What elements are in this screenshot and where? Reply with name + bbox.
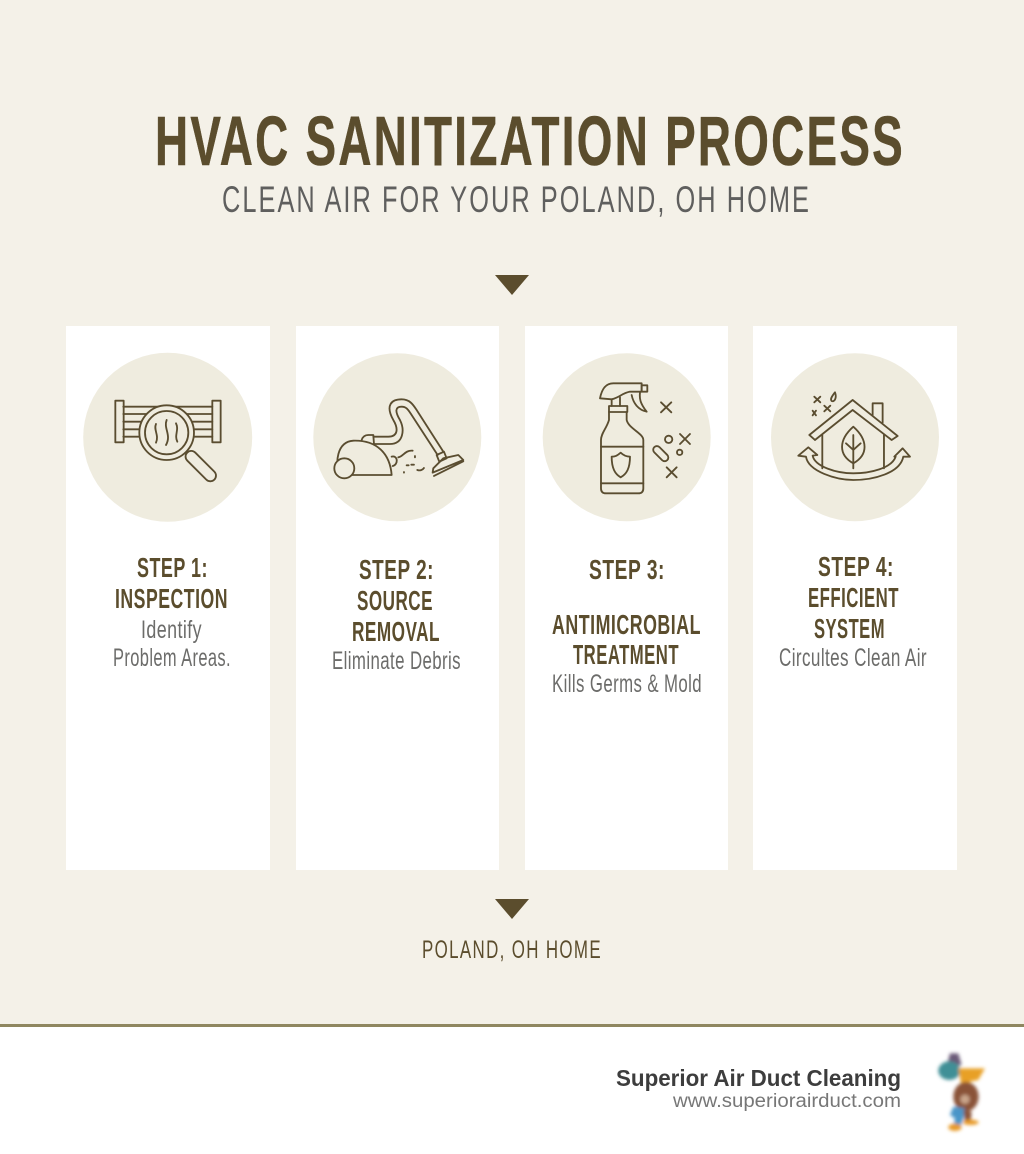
arrow: bottom	[495, 899, 529, 919]
website: www.superiorairduct.com	[672, 1091, 901, 1112]
step 2 name	[352, 585, 440, 647]
arrow: top	[495, 275, 529, 295]
icon: spray bottle	[543, 353, 711, 521]
step 1 description: Identify	[141, 616, 202, 644]
panel: step 1	[66, 326, 270, 870]
footer	[0, 1024, 1024, 1154]
brand name: Superior Air Duct Cleaning	[616, 1065, 901, 1091]
icon: vacuum cleaner	[313, 353, 481, 521]
step 1 name: INSPECTION	[115, 583, 228, 614]
step 3 name: TREATMENT	[573, 639, 679, 670]
destination label: POLAND, OH HOME	[422, 936, 602, 964]
step 4 name: SYSTEM	[814, 613, 885, 644]
step 4 heading: STEP 4:	[818, 551, 894, 582]
step 2 heading: STEP 2:	[359, 554, 434, 585]
panel: step 2	[296, 326, 499, 870]
step 4 name	[808, 582, 899, 644]
panel: step 3	[525, 326, 728, 870]
step 3 description: Kills Germs & Mold	[552, 670, 702, 698]
step 4 name: EFFICIENT	[808, 582, 899, 613]
icon: duct inspection	[83, 353, 252, 522]
panel: step 4	[753, 326, 957, 870]
step 2 name: REMOVAL	[352, 616, 440, 647]
step 1 heading: STEP 1:	[137, 552, 208, 583]
step 2 description: Eliminate Debris	[332, 647, 461, 675]
icon: house with clean air	[771, 353, 939, 521]
step 1 description: Problem Areas.	[113, 644, 231, 672]
step 3 heading: STEP 3:	[589, 554, 665, 585]
step 3 name: ANTIMICROBIAL	[552, 609, 701, 640]
icon: duck mascot	[938, 1053, 985, 1131]
step 4 description: Circultes Clean Air	[779, 644, 927, 672]
step 2 name: SOURCE	[357, 585, 433, 616]
step 1 description	[113, 616, 231, 672]
step 3 name	[552, 609, 701, 670]
